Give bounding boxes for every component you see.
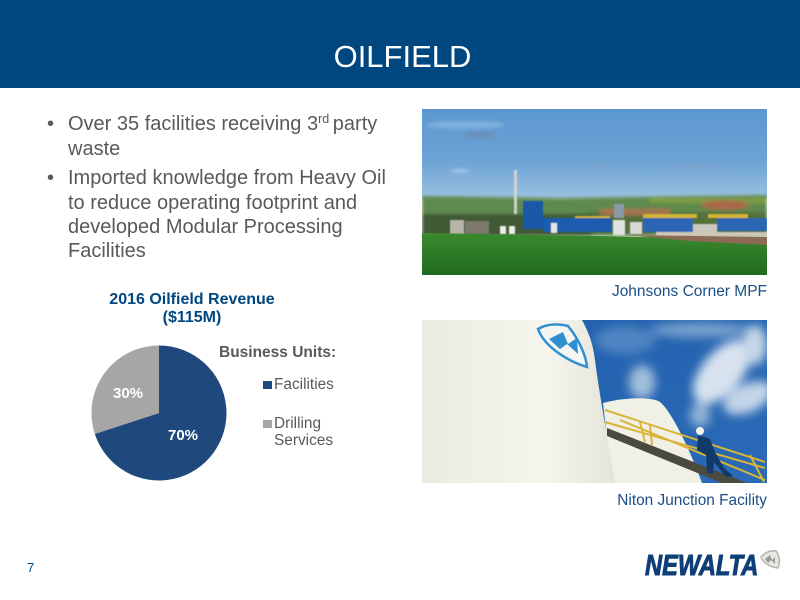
bullet two: Imported knowledge from Heavy Oil (68, 167, 386, 189)
legend item: facilities: Facilities (274, 376, 334, 393)
Newalta logo (644, 550, 780, 582)
bullet two: to reduce operating footprint and (68, 192, 357, 214)
chart title: 2016 Oilfield Revenue (109, 291, 275, 308)
pie chart (92, 346, 226, 480)
bullet one: Over 35 facilities receiving 3rd party (68, 112, 377, 135)
chart title (109, 291, 275, 326)
tank logo (538, 324, 587, 367)
bullet two: developed Modular Processing (68, 216, 343, 238)
legend item: drilling services (263, 415, 333, 449)
bullet one: • (47, 113, 54, 135)
bullet one (47, 112, 378, 160)
photo: Johnsons Corner MPF (422, 109, 767, 275)
bullet two (47, 167, 386, 262)
caption: Niton Junction Facility: Niton Junction Facility (617, 492, 767, 509)
title: OILFIELD (334, 39, 471, 74)
bullet list (47, 112, 386, 262)
slice: facilities 70% (95, 346, 226, 480)
worker (696, 427, 733, 477)
chart title: ($115M) (163, 309, 221, 326)
bullet two: Facilities (68, 240, 146, 262)
legend title: Business Units: (219, 344, 336, 361)
label 30%: 30% (113, 385, 143, 402)
photo: Niton Junction Facility (422, 320, 767, 483)
legend (219, 344, 336, 449)
logo emblem (760, 550, 780, 569)
slice: drilling services 30% (91, 346, 159, 434)
caption: Johnsons Corner MPF: Johnsons Corner MPF (612, 283, 767, 300)
legend item: drilling services: Drilling (274, 415, 321, 432)
legend item: drilling services: Services (274, 432, 333, 449)
logo wordmark: NEWALTA (645, 550, 758, 582)
header band (0, 0, 800, 88)
page number: 7 (27, 560, 34, 575)
bullet one: waste (68, 138, 120, 160)
bullet two: • (47, 167, 54, 189)
label 70%: 70% (168, 427, 198, 444)
